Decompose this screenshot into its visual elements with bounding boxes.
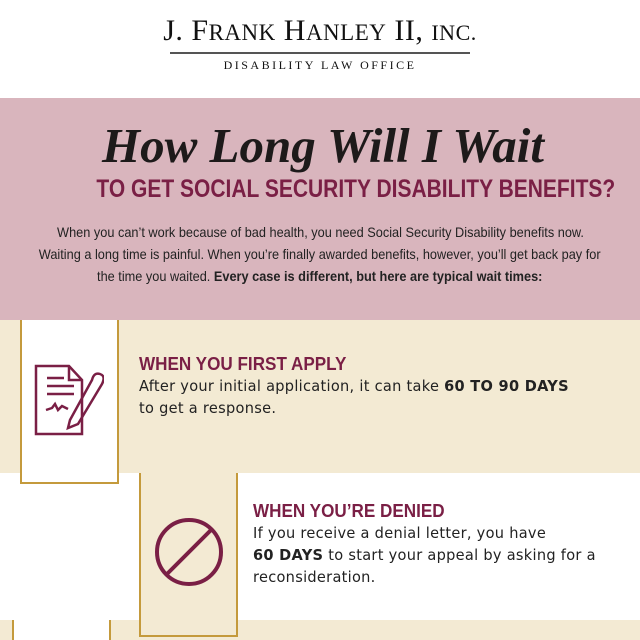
step 2 text: If you receive a denial letter, you have [253, 524, 546, 542]
step 1 text [139, 354, 569, 417]
title: How Long Will I Wait [102, 118, 544, 173]
step 2 text: reconsideration. [253, 568, 376, 586]
logo: J. FRANK HANLEY II, INC. [163, 14, 477, 47]
step 2 text [253, 501, 596, 586]
icon: document with pen [34, 364, 104, 436]
header band [0, 98, 640, 320]
icon: prohibition sign [155, 518, 223, 586]
box 2: denial icon [139, 473, 238, 637]
logo: DISABILITY LAW OFFICE [224, 58, 416, 72]
step 1 text: After your initial application, it can take 60 TO 90 DAYS [139, 377, 569, 395]
intro text: When you can’t work because of bad health, you need Social Security Disability benefits now. [57, 224, 583, 240]
step 1 text: WHEN YOU FIRST APPLY [139, 354, 346, 374]
box 1: application icon [20, 320, 119, 484]
intro text: Waiting a long time is painful. When you’re finally awarded benefits, however, you’ll get back pay for [39, 246, 601, 262]
intro text [38, 224, 601, 284]
box 3 top [12, 620, 111, 640]
intro text: the time you waited. Every case is different, but here are typical wait times: [97, 268, 543, 284]
step 2 text: 60 DAYS to start your appeal by asking for a [253, 546, 596, 564]
step 1 text: to get a response. [139, 399, 276, 417]
subtitle: TO GET SOCIAL SECURITY DISABILITY BENEFITS? [97, 175, 615, 203]
logo [163, 14, 477, 72]
section 1 background [0, 320, 640, 473]
section 3 background [0, 620, 640, 640]
step 2 text: WHEN YOU’RE DENIED [253, 501, 445, 521]
